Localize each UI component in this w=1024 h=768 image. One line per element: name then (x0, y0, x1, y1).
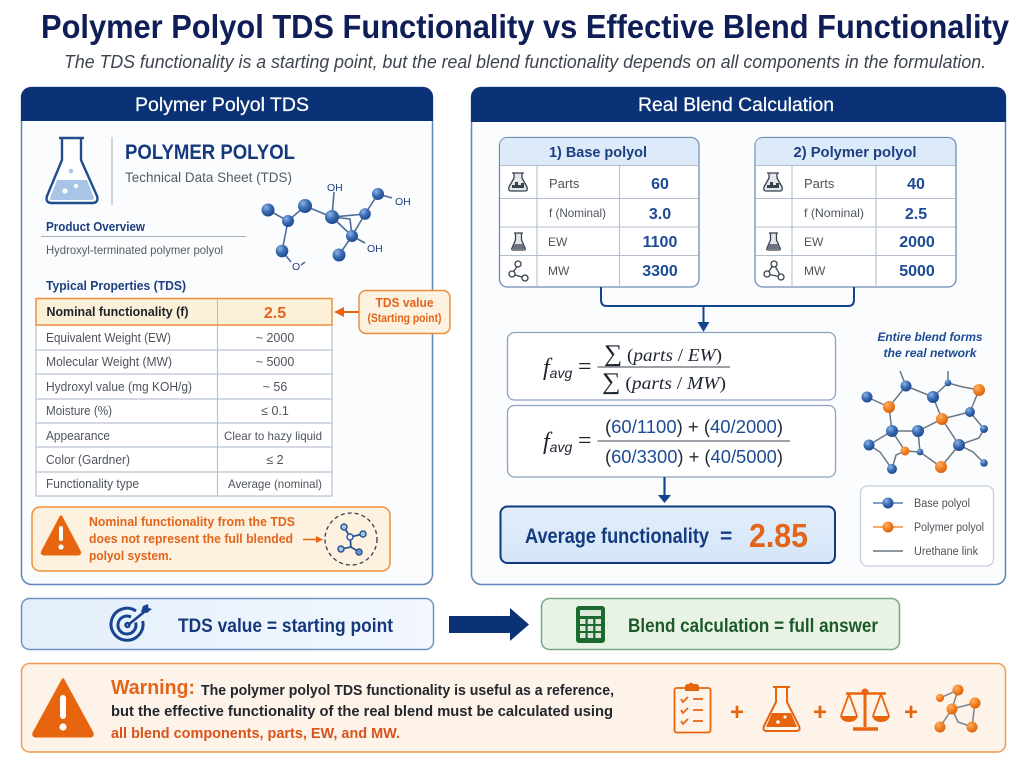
connector arrow (601, 287, 854, 332)
product heading: POLYMER POLYOL (125, 141, 295, 164)
network caption: the real network (884, 346, 978, 360)
warning text (111, 676, 614, 742)
plus: + (904, 699, 918, 726)
panel: Polymer Polyol TDS (21, 87, 433, 584)
panel header (471, 87, 1006, 122)
table: base polyol (500, 138, 699, 287)
note: nominal functionality warning: polyol system. (89, 549, 172, 563)
table: polymer polyol (755, 138, 956, 287)
highlighted row: nominal functionality (36, 298, 332, 325)
molecule (262, 182, 411, 273)
panel: Real Blend Calculation (471, 87, 1006, 584)
properties table: Molecular Weight (MW) (46, 355, 172, 369)
panel header: Real Blend Calculation (638, 95, 834, 116)
banner: blend calculation (542, 598, 900, 650)
icon: molecule in dashed circle (325, 513, 377, 565)
product overview text: Hydroxyl-terminated polymer polyol (46, 243, 223, 257)
banner: blend calculation: Blend calculation = full answer (628, 616, 879, 637)
icon: flask (47, 138, 97, 203)
icon: beaker (509, 173, 527, 191)
legend: Urethane link (914, 546, 978, 558)
typical properties heading: Typical Properties (TDS) (46, 278, 186, 293)
properties table: ~ 5000 (256, 355, 294, 369)
document type: Technical Data Sheet (TDS) (125, 169, 292, 185)
warning text: all blend components, parts, EW, and MW. (111, 726, 400, 742)
network diagram (862, 371, 988, 474)
properties table: Hydroxyl value (mg KOH/g) (46, 380, 192, 394)
subtitle: The TDS functionality is a starting point, but the real blend functionality depends on all components in the formulation. (64, 51, 986, 72)
icon: link triangle (764, 261, 784, 280)
molecule: OH (395, 196, 411, 208)
panel: warning (22, 664, 1006, 752)
properties table: Appearance (46, 429, 110, 443)
icon: balance scales (840, 688, 890, 729)
table: base polyol: Parts (549, 176, 580, 191)
properties table: ≤ 2 (266, 453, 284, 467)
table: polymer polyol: 2.5 (905, 206, 927, 223)
panel header: Polymer Polyol TDS (135, 95, 309, 116)
result box: = (720, 525, 732, 548)
properties table: Average (nominal) (228, 477, 322, 491)
table: polymer polyol: MW (804, 264, 826, 278)
icon: warning triangle (34, 680, 92, 736)
molecule: O (292, 261, 300, 273)
divider (111, 137, 113, 205)
icon: warning triangle (42, 517, 80, 554)
table: polymer polyol: Parts (804, 176, 835, 191)
properties table: Equivalent Weight (EW) (46, 331, 171, 345)
table: polymer polyol: 5000 (899, 263, 935, 280)
molecule: OH (327, 182, 343, 194)
banner: TDS value: TDS value = starting point (178, 616, 394, 637)
formula: values: avg (550, 439, 572, 455)
table: base polyol: 1) Base polyol (549, 144, 647, 161)
properties table: Functionality type (46, 477, 139, 491)
icon: flask (763, 687, 800, 731)
result box: 2.85 (749, 517, 808, 554)
properties table: Moisture (%) (46, 404, 112, 418)
network caption (878, 330, 983, 360)
table: polymer polyol: 2) Polymer polyol (794, 144, 916, 161)
table: base polyol: 60 (651, 176, 669, 193)
table: base polyol: f (Nominal) (549, 206, 606, 220)
callout: TDS value (359, 290, 450, 334)
table: polymer polyol: EW (804, 235, 824, 249)
formula: general: avg (550, 365, 572, 381)
note: nominal functionality warning: Nominal functionality from the TDS (89, 515, 295, 529)
icon: target (111, 604, 152, 640)
formula: values: (60/3300) + (40/5000) (605, 447, 783, 467)
panel header (21, 87, 433, 121)
icon: calculator (576, 606, 605, 643)
legend: Polymer polyol (914, 522, 984, 534)
icon: network (934, 684, 980, 732)
result box (500, 506, 835, 563)
properties table (36, 298, 332, 496)
table: base polyol: 3.0 (649, 206, 671, 223)
molecule: OH (367, 243, 383, 255)
formula: general: f (543, 355, 550, 381)
icon: flask (767, 233, 780, 250)
legend (860, 486, 994, 566)
callout: TDS value: TDS value (376, 295, 434, 310)
warning text: The polymer polyol TDS functionality is useful as a reference, (201, 683, 614, 699)
formula: general: ∑ (parts / EW) (604, 341, 722, 367)
properties table: ~ 56 (263, 380, 287, 394)
note: nominal functionality warning: does not represent the full blended (89, 532, 293, 546)
formula: values: (60/1100) + (40/2000) (605, 417, 783, 437)
formula: general (508, 332, 836, 400)
formula: values: f (543, 429, 550, 455)
formula: general: ∑ (parts / MW) (602, 369, 726, 395)
warning text: but the effective functionality of the real blend must be calculated using (111, 704, 613, 720)
icon: flask (512, 233, 525, 250)
properties table: ≤ 0.1 (261, 404, 289, 418)
plus: + (813, 699, 827, 726)
arrow: to result (658, 477, 671, 503)
icon: beaker (764, 173, 782, 191)
table: polymer polyol: f (Nominal) (804, 206, 864, 220)
product overview heading: Product Overview (46, 220, 145, 234)
plus: + (730, 699, 744, 726)
banner: TDS value (22, 598, 434, 650)
callout: TDS value: (Starting point) (368, 313, 442, 325)
note: nominal functionality warning (32, 507, 390, 571)
legend: Base polyol (914, 498, 970, 510)
table: base polyol: MW (548, 264, 570, 278)
highlighted row: nominal functionality: Nominal functionality (f) (46, 304, 188, 319)
table: polymer polyol: 40 (907, 176, 925, 193)
table: base polyol: EW (548, 235, 568, 249)
table: base polyol: 1100 (643, 234, 677, 251)
icon: clipboard (674, 682, 710, 732)
formula: values (508, 406, 836, 477)
properties table: ~ 2000 (256, 331, 294, 345)
table: polymer polyol: 2000 (899, 234, 935, 251)
formula: general: = (578, 354, 592, 380)
icon: link nodes (509, 261, 528, 281)
arrow: starting point to full answer (449, 608, 529, 641)
result box: Average functionality (525, 525, 709, 548)
properties table: Clear to hazy liquid (224, 429, 322, 443)
highlighted row: nominal functionality: 2.5 (264, 305, 286, 322)
properties table: Color (Gardner) (46, 453, 130, 467)
warning text: Warning: (111, 676, 195, 699)
arrow: callout to table (334, 307, 359, 317)
network caption: Entire blend forms (878, 330, 983, 344)
formula: values: = (578, 428, 592, 454)
table: base polyol: 3300 (642, 263, 678, 280)
